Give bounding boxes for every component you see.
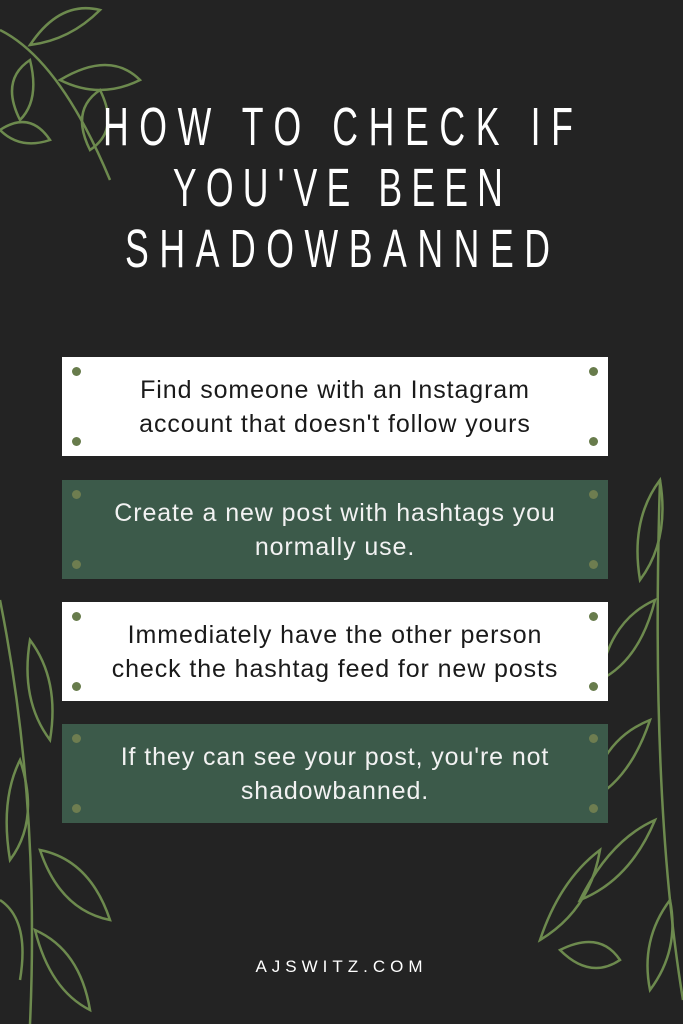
step 4 box: If they can see your post, you're not — [121, 742, 549, 770]
leaves: top left — [0, 8, 140, 180]
step 2 box — [62, 480, 608, 579]
title — [103, 97, 573, 279]
leaves: right — [540, 480, 683, 1000]
title: HOW TO CHECK IF — [103, 97, 573, 157]
title: SHADOWBANNED — [125, 219, 550, 279]
step 2 box: normally use. — [255, 532, 415, 560]
step 3 box: Immediately have the other person — [128, 620, 542, 648]
leaves: bottom left — [0, 600, 110, 1024]
step 1 box: account that doesn't follow yours — [139, 410, 531, 438]
step 4 box — [62, 724, 608, 823]
step 4 box: shadowbanned. — [241, 776, 429, 804]
step 2 box: Create a new post with hashtags you — [114, 498, 556, 526]
step 1 box: Find someone with an Instagram — [140, 376, 530, 404]
step 1 box — [62, 357, 608, 456]
title: YOU'VE BEEN — [173, 158, 503, 218]
step 3 box — [62, 602, 608, 701]
footer: AJSWITZ.COM — [255, 957, 428, 976]
step 3 box: check the hashtag feed for new posts — [112, 654, 558, 682]
